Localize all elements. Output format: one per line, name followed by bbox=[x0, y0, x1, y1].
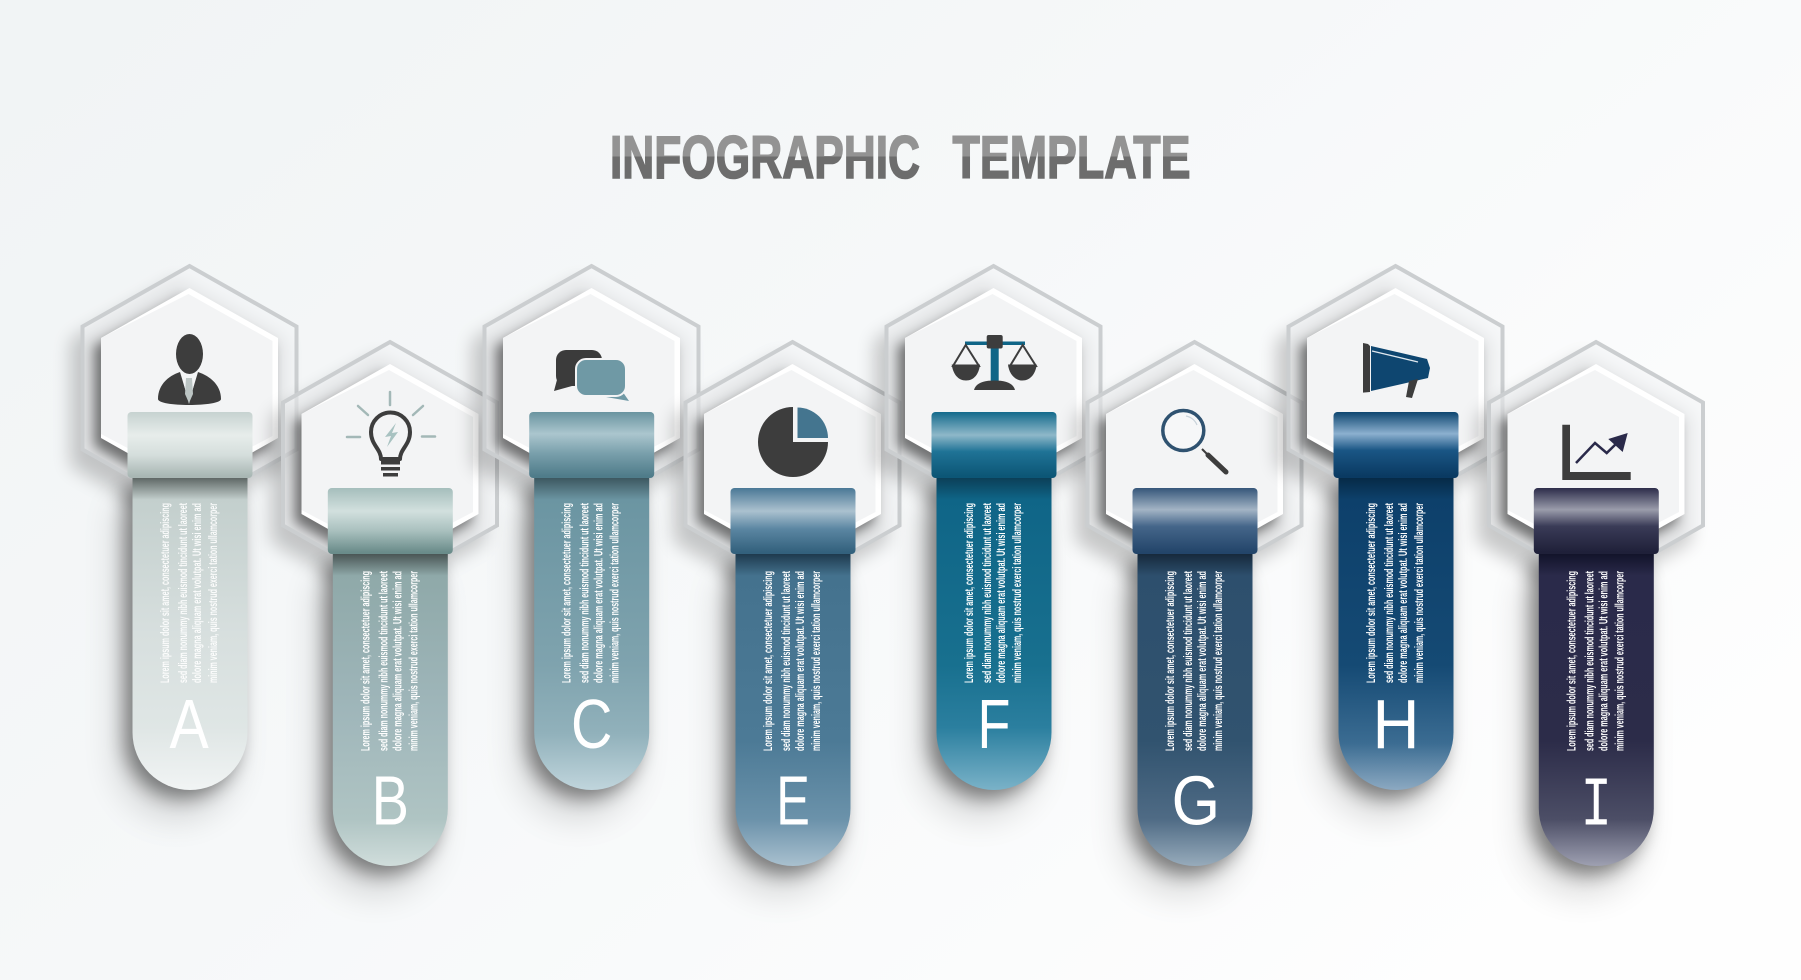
panel: E bbox=[674, 342, 900, 892]
icon: light bulb bbox=[347, 392, 435, 476]
ribbon E: dolore magna aliquam erat volutpat. Ut wisi enim ad bbox=[793, 571, 807, 751]
hexagon frame A bbox=[70, 266, 296, 526]
ribbon B: minim veniam, quis nostrud exerci tation ullamcorper bbox=[406, 571, 420, 751]
ribbon C: dolore magna aliquam erat volutpat. Ut wisi enim ad bbox=[592, 503, 606, 683]
ribbon C bbox=[520, 412, 654, 816]
ribbon F bbox=[922, 412, 1056, 816]
ribbon C: C bbox=[571, 685, 612, 763]
ribbon H: Lorem ipsum dolor sit amet, consectetuer adipiscing bbox=[1364, 503, 1378, 683]
icon: magnifying glass bbox=[1163, 410, 1226, 472]
ribbon H: H bbox=[1372, 686, 1420, 764]
hexagon frame G bbox=[1076, 342, 1302, 602]
ribbon B: B bbox=[372, 763, 409, 840]
icon: speech bubbles bbox=[554, 350, 629, 401]
ribbon B: dolore magna aliquam erat volutpat. Ut wisi enim ad bbox=[390, 571, 404, 751]
icon: megaphone bbox=[1363, 343, 1430, 398]
ribbon C: Lorem ipsum dolor sit amet, consectetuer adipiscing bbox=[560, 503, 574, 683]
hexagon frame F bbox=[874, 266, 1100, 526]
ribbon G: dolore magna aliquam erat volutpat. Ut wisi enim ad bbox=[1195, 571, 1209, 751]
panel: B bbox=[271, 342, 497, 892]
ribbon B: Lorem ipsum dolor sit amet, consectetuer adipiscing bbox=[358, 571, 372, 751]
ribbon F: Lorem ipsum dolor sit amet, consectetuer adipiscing bbox=[962, 503, 976, 683]
ribbon F: F bbox=[978, 685, 1010, 764]
ribbon A: dolore magna aliquam erat volutpat. Ut wisi enim ad bbox=[190, 503, 204, 683]
ribbon I: Lorem ipsum dolor sit amet, consectetuer adipiscing bbox=[1564, 571, 1578, 751]
ribbon I: dolore magna aliquam erat volutpat. Ut wisi enim ad bbox=[1596, 571, 1610, 751]
panel: F bbox=[874, 266, 1100, 816]
ribbon H bbox=[1324, 412, 1458, 816]
hexagon frame C bbox=[472, 266, 698, 526]
panel: C bbox=[472, 266, 698, 816]
ribbon G: minim veniam, quis nostrud exerci tation ullamcorper bbox=[1211, 571, 1225, 751]
ribbon B: sed diam nonummy nibh euismod tincidunt ut laoreet bbox=[376, 571, 390, 751]
panel: I bbox=[1477, 342, 1703, 892]
ribbon H: sed diam nonummy nibh euismod tincidunt ut laoreet bbox=[1382, 503, 1396, 683]
panel: H bbox=[1276, 266, 1502, 816]
ribbon I bbox=[1525, 488, 1659, 892]
ribbon H: minim veniam, quis nostrud exerci tation ullamcorper bbox=[1412, 503, 1426, 683]
ribbon F: minim veniam, quis nostrud exerci tation ullamcorper bbox=[1010, 503, 1024, 683]
panel: G bbox=[1076, 342, 1302, 892]
ribbon C: minim veniam, quis nostrud exerci tation ullamcorper bbox=[608, 503, 622, 683]
hexagon frame H bbox=[1276, 266, 1502, 526]
ribbon C: sed diam nonummy nibh euismod tincidunt ut laoreet bbox=[578, 503, 592, 683]
icon: growth chart bbox=[1562, 425, 1631, 480]
ribbon G: sed diam nonummy nibh euismod tincidunt ut laoreet bbox=[1181, 571, 1195, 751]
ribbon E bbox=[722, 488, 856, 892]
ribbon I: I bbox=[1581, 766, 1612, 846]
ribbon F: dolore magna aliquam erat volutpat. Ut wisi enim ad bbox=[994, 503, 1008, 683]
ribbon I: minim veniam, quis nostrud exerci tation ullamcorper bbox=[1612, 571, 1626, 751]
ribbon G: G bbox=[1172, 762, 1220, 840]
title: TEMPLATE bbox=[952, 124, 1190, 191]
ribbon E: Lorem ipsum dolor sit amet, consectetuer adipiscing bbox=[761, 571, 775, 751]
ribbon A: A bbox=[170, 684, 209, 763]
icon: scales bbox=[952, 335, 1037, 390]
hexagon frame E bbox=[674, 342, 900, 602]
ribbon E: sed diam nonummy nibh euismod tincidunt ut laoreet bbox=[779, 571, 793, 751]
ribbon G: Lorem ipsum dolor sit amet, consectetuer adipiscing bbox=[1163, 571, 1177, 751]
ribbon A: minim veniam, quis nostrud exerci tation ullamcorper bbox=[206, 503, 220, 683]
panel: A bbox=[70, 266, 296, 816]
hexagon frame B bbox=[271, 342, 497, 602]
ribbon E: E bbox=[776, 761, 810, 839]
icon: pie chart bbox=[758, 407, 828, 477]
title: INFOGRAPHIC bbox=[610, 124, 920, 191]
ribbon G bbox=[1124, 488, 1258, 892]
ribbon A: Lorem ipsum dolor sit amet, consectetuer adipiscing bbox=[158, 503, 172, 683]
ribbon H: dolore magna aliquam erat volutpat. Ut wisi enim ad bbox=[1396, 503, 1410, 683]
ribbon A: sed diam nonummy nibh euismod tincidunt ut laoreet bbox=[176, 503, 190, 683]
ribbon A bbox=[118, 412, 252, 816]
icon: businessman bbox=[158, 334, 221, 405]
ribbon B bbox=[319, 488, 453, 892]
ribbon E: minim veniam, quis nostrud exerci tation ullamcorper bbox=[809, 571, 823, 751]
ribbon F: sed diam nonummy nibh euismod tincidunt ut laoreet bbox=[980, 503, 994, 683]
ribbon I: sed diam nonummy nibh euismod tincidunt ut laoreet bbox=[1582, 571, 1596, 751]
hexagon frame I bbox=[1477, 342, 1703, 602]
